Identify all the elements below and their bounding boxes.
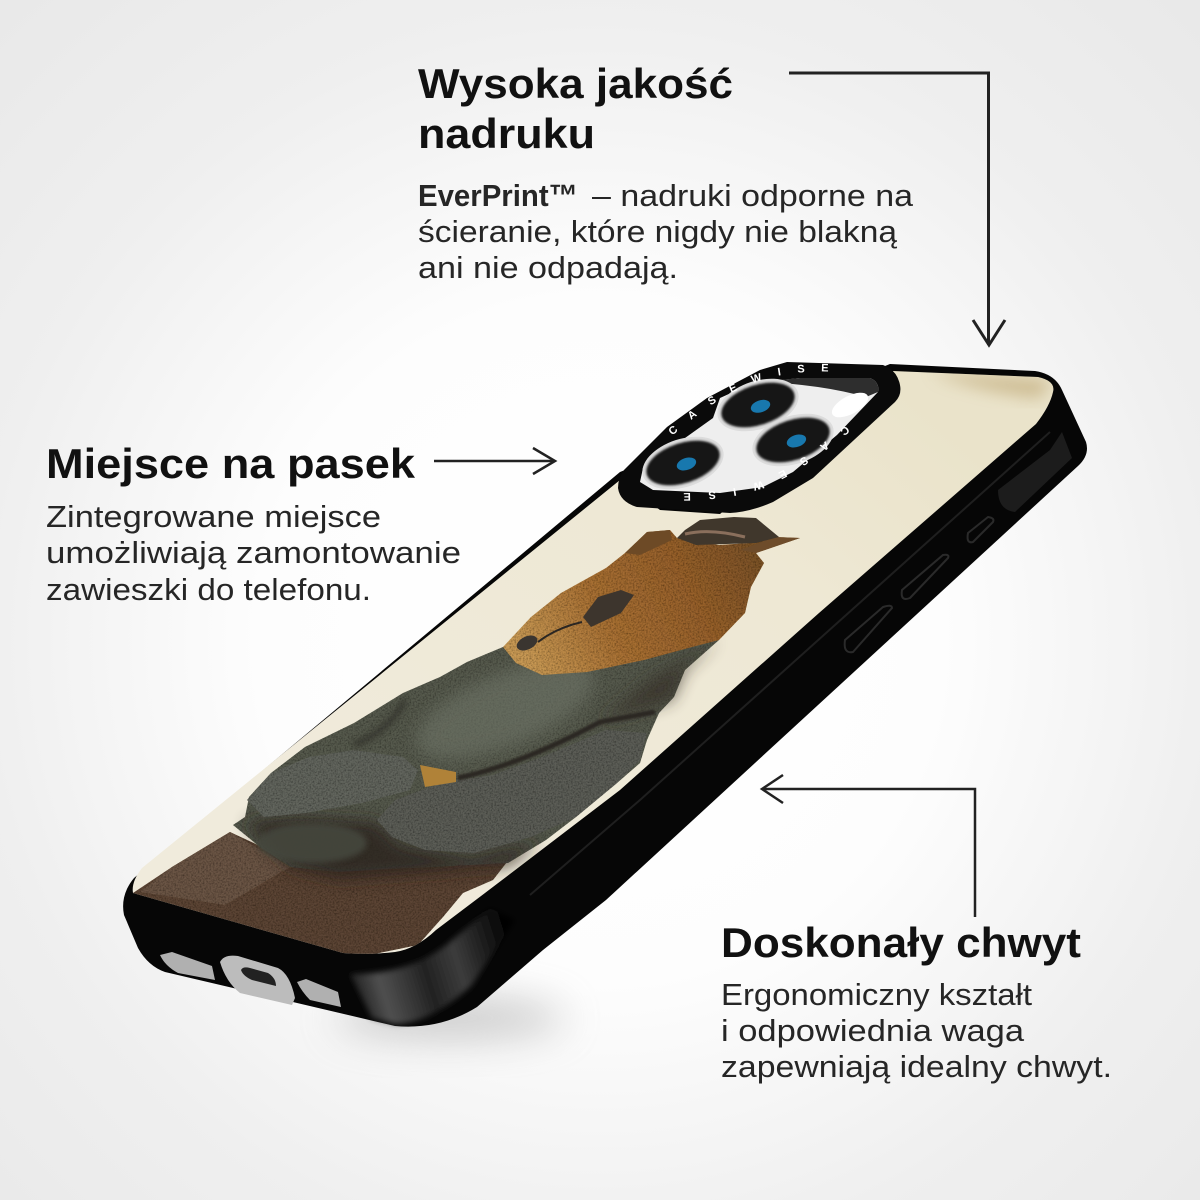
- heading: Doskonały chwyt: [721, 919, 1081, 966]
- side buttons: [845, 517, 993, 652]
- callout: strap slot: [46, 440, 461, 607]
- lower shadow: [245, 818, 540, 880]
- strap slot: [998, 432, 1072, 512]
- neck shade: [608, 642, 718, 718]
- body text: ścieranie, które nigdy nie blakną: [418, 214, 898, 249]
- bear trousers: [133, 832, 507, 960]
- island window: [640, 378, 878, 493]
- body text: zapewniają idealny chwyt.: [721, 1049, 1112, 1084]
- flash: [828, 388, 872, 422]
- arrow: strap slot: [434, 448, 555, 474]
- usb port: [220, 956, 295, 1005]
- brand text top: CASEWISE: [669, 364, 828, 434]
- trouser flap: [140, 832, 290, 905]
- speaker left: [160, 952, 215, 980]
- arm crease: [354, 700, 405, 745]
- body text: ani nie odpadają.: [418, 250, 678, 285]
- camera island: [618, 362, 900, 513]
- lens 2: [746, 404, 840, 476]
- bumper: [123, 364, 1087, 1027]
- body text: Zintegrowane miejsce: [46, 499, 381, 534]
- arrow: grip: [762, 775, 975, 917]
- paper: [120, 360, 1070, 970]
- torso highlight: [414, 664, 596, 763]
- pipe stem: [538, 622, 582, 642]
- sweater crease: [458, 712, 655, 778]
- heading: Miejsce na pasek: [46, 440, 416, 487]
- heading: Wysoka jakość: [418, 60, 733, 107]
- left ear: [625, 530, 672, 555]
- side groove: [530, 432, 1050, 895]
- lens 3: [636, 427, 730, 499]
- body text: i odpowiednia waga: [721, 1013, 1025, 1048]
- hat band: [685, 532, 745, 537]
- body text: [418, 178, 914, 285]
- island ring: [618, 362, 900, 513]
- bear head: [503, 530, 800, 675]
- body text: – nadruki odporne na: [592, 178, 914, 213]
- hat: [677, 517, 779, 545]
- phone case: [123, 362, 1087, 1028]
- body text: zawieszki do telefonu.: [46, 572, 371, 607]
- arm upper: [247, 750, 418, 817]
- pipe bowl: [516, 636, 538, 650]
- body text: EverPrint™: [418, 178, 578, 213]
- lower mound: [257, 823, 367, 863]
- body text: [721, 977, 1112, 1084]
- speaker right: [297, 979, 341, 1007]
- brand text bottom: CASEWISE: [684, 427, 849, 501]
- glossy corner: [350, 908, 515, 1024]
- lens 1: [711, 369, 805, 441]
- callout: grip: [721, 919, 1112, 1084]
- right ear: [740, 537, 800, 553]
- paper tone: [930, 372, 1052, 398]
- arm lower: [377, 730, 647, 853]
- bear snout: [583, 590, 634, 627]
- paw: [420, 765, 456, 787]
- heading: nadruku: [418, 110, 595, 157]
- window shade: [760, 378, 878, 397]
- callout: print quality: [418, 60, 914, 285]
- usb hole: [241, 967, 276, 986]
- body text: Ergonomiczny kształt: [721, 977, 1032, 1012]
- body text: umożliwiają zamontowanie: [46, 535, 461, 570]
- back print: [120, 360, 1070, 970]
- ports: [160, 952, 341, 1007]
- bear sweater: [233, 620, 719, 872]
- phone shadow: [335, 998, 565, 1038]
- arrow: print quality: [789, 73, 1005, 345]
- body text: [46, 499, 461, 607]
